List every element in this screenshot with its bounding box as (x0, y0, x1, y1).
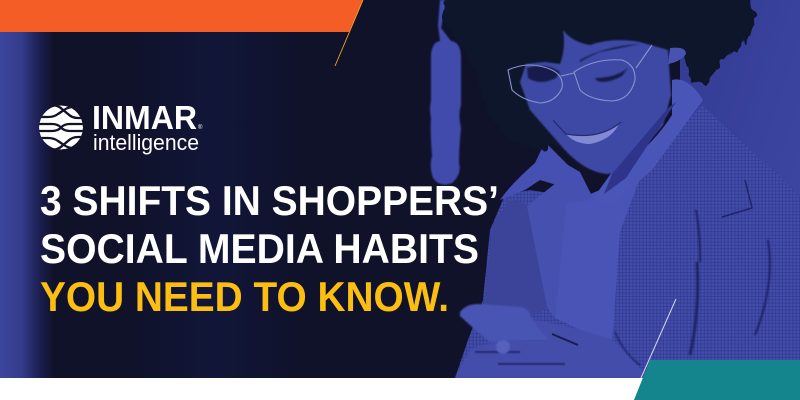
shirt collar right (592, 79, 703, 204)
hand at collar (500, 142, 594, 200)
smile and teeth (566, 122, 620, 144)
photo: woman looking at phone (430, 0, 800, 378)
hair (441, 0, 756, 150)
left lapel tone (484, 200, 548, 318)
white bottom strip (0, 378, 800, 400)
headline (40, 177, 499, 320)
orange top bar (0, 0, 363, 32)
jacket body (455, 105, 800, 378)
logo (39, 106, 202, 154)
shirt placket (555, 178, 640, 345)
jacket collar flap (640, 106, 752, 217)
logo subline: intelligence (93, 130, 199, 155)
yellow accent line (335, 0, 363, 66)
headline line 1: 3 SHIFTS IN SHOPPERS’ (40, 177, 499, 224)
registered mark: ® (198, 124, 203, 131)
neck shadow (604, 102, 676, 194)
ear (668, 48, 686, 64)
glasses (508, 45, 652, 103)
jacket dark folds (615, 200, 770, 365)
headline line 2: SOCIAL MEDIA HABITS (40, 225, 479, 272)
teal corner block (634, 360, 800, 400)
face (520, 30, 671, 174)
hand and phone (460, 304, 550, 342)
white accent line (641, 299, 676, 378)
wall pillar (430, 0, 461, 185)
eyebrows and eyes (527, 44, 640, 82)
inner shirt (527, 175, 590, 318)
headline line 3: YOU NEED TO KNOW. (40, 273, 449, 320)
logo mark (39, 106, 83, 150)
logo wordmark: INMAR (92, 99, 197, 136)
